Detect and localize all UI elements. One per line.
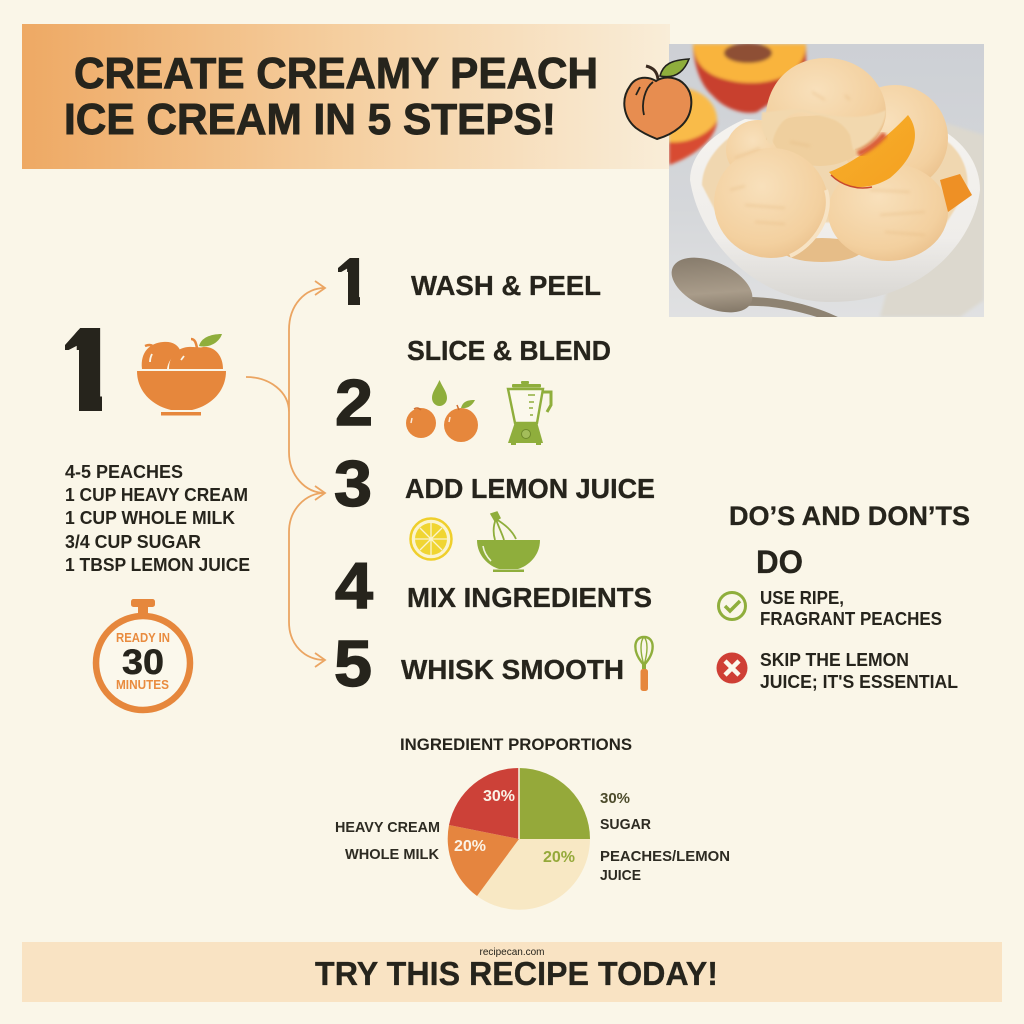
pie labels: PEACHES/LEMON — [600, 848, 730, 865]
heading: DO’S AND DON’TS — [729, 501, 970, 531]
peach slice — [829, 115, 915, 187]
title banner — [22, 24, 670, 169]
bowl — [690, 119, 980, 302]
timer: ready in 30 minutes: 30 — [122, 643, 164, 682]
ingredients list: 1 TBSP LEMON JUICE — [65, 555, 250, 575]
footer banner — [22, 942, 1002, 1002]
spoon — [749, 297, 838, 317]
step 3: 3 — [334, 447, 372, 520]
step 3 — [334, 447, 655, 572]
don't text — [760, 650, 958, 692]
do text: FRAGRANT PEACHES — [760, 609, 942, 629]
scoops — [847, 85, 948, 178]
icon: whisk and bowl — [477, 512, 540, 572]
title line 1: CREATE CREAMY PEACH — [74, 49, 598, 98]
icon: bowl of peaches — [137, 334, 226, 416]
ingredients list: 1 CUP HEAVY CREAM — [65, 485, 248, 505]
icon: lemon slice — [410, 518, 452, 560]
title line 2: ICE CREAM IN 5 STEPS! — [64, 95, 556, 144]
pie chart: 30% — [483, 788, 515, 805]
do heading: DO — [756, 544, 803, 580]
photo: bowl of peach ice cream — [663, 43, 984, 324]
icon: check — [718, 592, 746, 620]
ingredients list: 4-5 PEACHES — [65, 462, 183, 482]
do text: USE RIPE, — [760, 588, 844, 608]
pie labels: HEAVY CREAM — [335, 819, 440, 836]
step 3: ADD LEMON JUICE — [405, 473, 655, 504]
pie labels: SUGAR — [600, 816, 651, 833]
icon: whisk — [635, 637, 653, 691]
icon: peaches and drop — [406, 380, 478, 442]
call to action: TRY THIS RECIPE TODAY! — [315, 955, 718, 992]
icon: peach with leaf — [624, 59, 691, 139]
pie labels: WHOLE MILK — [345, 846, 439, 863]
ingredients list — [65, 462, 250, 575]
timer: ready in 30 minutes — [96, 599, 190, 710]
source credit: recipecan.com — [479, 947, 545, 958]
big number one: 1 — [45, 304, 125, 435]
step 1: WASH & PEEL — [411, 270, 601, 301]
pie chart — [448, 768, 590, 910]
icon: cross — [716, 652, 748, 684]
step 4: MIX INGREDIENTS — [407, 582, 652, 613]
step 5: 5 — [334, 627, 372, 700]
step 2: SLICE & BLEND — [407, 335, 611, 366]
timer: ready in 30 minutes: MINUTES — [116, 678, 169, 692]
step 4: 4 — [335, 549, 373, 622]
pie chart: 20% — [543, 849, 575, 866]
do text — [760, 588, 942, 629]
timer: ready in 30 minutes: READY IN — [116, 631, 170, 645]
pie labels: 30% — [600, 790, 630, 807]
icon: blender — [508, 381, 551, 444]
chart title: INGREDIENT PROPORTIONS — [400, 735, 632, 754]
don't text: SKIP THE LEMON — [760, 650, 909, 670]
pie labels — [335, 790, 730, 884]
step 5: WHISK SMOOTH — [401, 654, 624, 685]
flow arrows — [246, 281, 325, 667]
chart: ingredient proportions — [335, 735, 730, 910]
step 2 — [335, 335, 611, 444]
step 4 — [335, 549, 652, 622]
ingredients list: 3/4 CUP SUGAR — [65, 532, 201, 552]
pie chart: 20% — [454, 838, 486, 855]
step 5 — [334, 627, 653, 700]
ingredients list: 1 CUP WHOLE MILK — [65, 508, 235, 528]
panel: do's and don'ts — [716, 501, 970, 692]
step 2: 2 — [335, 366, 373, 439]
step 1: 1 — [331, 245, 371, 320]
pie labels: JUICE — [600, 867, 641, 884]
don't text: JUICE; IT'S ESSENTIAL — [760, 672, 958, 692]
step 1 — [338, 258, 600, 305]
scoop texture — [730, 92, 925, 235]
